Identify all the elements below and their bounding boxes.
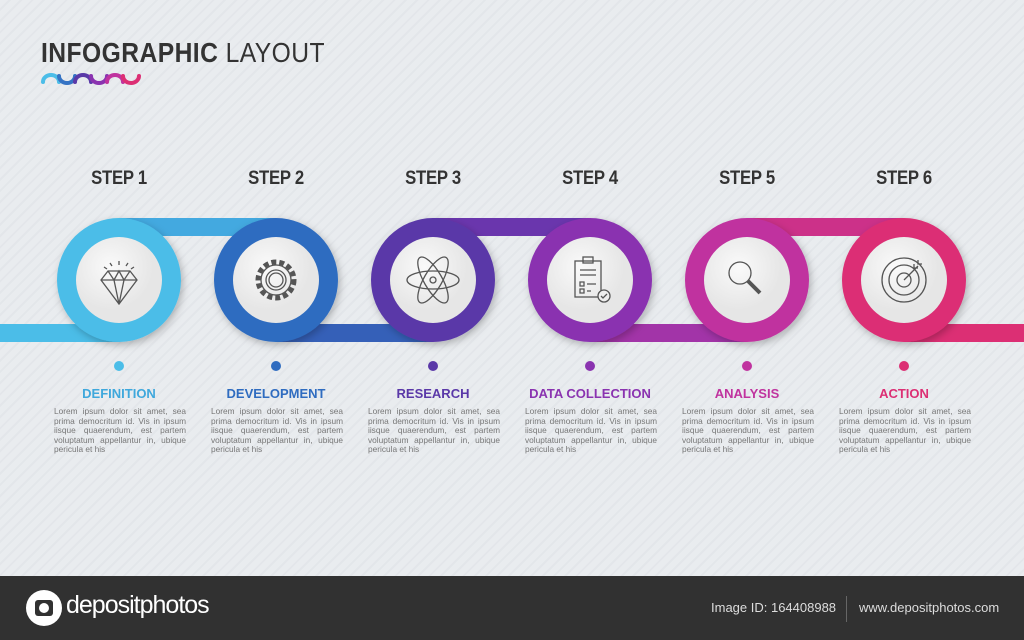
icon: clipboard (575, 257, 610, 302)
text: DEVELOPMENT (227, 386, 325, 401)
circle 4 (528, 218, 652, 342)
footer info: Image ID: 164408988 (711, 600, 836, 615)
icon: magnifier (729, 262, 760, 293)
text: Lorem ipsum dolor sit amet, sea prima democritum id. Vis in ipsum iisque quaerendum, est partem voluptatum appellantur in, ubique pericula et his (839, 406, 971, 454)
bands (0, 324, 120, 342)
text: Lorem ipsum dolor sit amet, sea prima democritum id. Vis in ipsum iisque quaerendum, est partem voluptatum appellantur in, ubique pericula et his (525, 406, 657, 454)
circle 1 (57, 218, 181, 342)
step labels (91, 168, 932, 189)
title: INFOGRAPHIC LAYOUT (41, 37, 325, 68)
text: Lorem ipsum dolor sit amet, sea prima democritum id. Vis in ipsum iisque quaerendum, est partem voluptatum appellantur in, ubique pericula et his (682, 406, 814, 454)
footer (0, 576, 1024, 640)
text: Lorem ipsum dolor sit amet, sea prima democritum id. Vis in ipsum iisque quaerendum, est partem voluptatum appellantur in, ubique pericula et his (54, 406, 186, 454)
text: STEP 6 (876, 168, 932, 189)
text: STEP 3 (405, 168, 461, 189)
text: STEP 5 (719, 168, 775, 189)
text: STEP 2 (248, 168, 304, 189)
footer: depositphotos (66, 591, 209, 619)
text: DEFINITION (82, 386, 156, 401)
text: Lorem ipsum dolor sit amet, sea prima democritum id. Vis in ipsum iisque quaerendum, est partem voluptatum appellantur in, ubique pericula et his (211, 406, 343, 454)
dots (114, 361, 909, 371)
timeline graphic (0, 217, 1024, 349)
icon: gear (258, 262, 294, 298)
footer logo (26, 590, 62, 626)
text: ANALYSIS (715, 386, 779, 401)
text: DATA COLLECTION (529, 386, 651, 401)
descriptions (54, 406, 971, 454)
circle 3 (371, 218, 495, 342)
circle 6 (842, 218, 966, 342)
text: STEP 1 (91, 168, 147, 189)
icon: target (882, 258, 926, 302)
icon: diamond (101, 261, 137, 304)
step headings (82, 386, 929, 401)
title wave decoration (41, 73, 141, 85)
text: ACTION (879, 386, 929, 401)
circle 2 (214, 218, 338, 342)
circle 5 (685, 218, 809, 342)
footer: www.depositphotos.com (859, 600, 999, 615)
text: Lorem ipsum dolor sit amet, sea prima democritum id. Vis in ipsum iisque quaerendum, est partem voluptatum appellantur in, ubique pericula et his (368, 406, 500, 454)
icon: atom (407, 253, 459, 307)
text: RESEARCH (397, 386, 469, 401)
text: STEP 4 (562, 168, 618, 189)
